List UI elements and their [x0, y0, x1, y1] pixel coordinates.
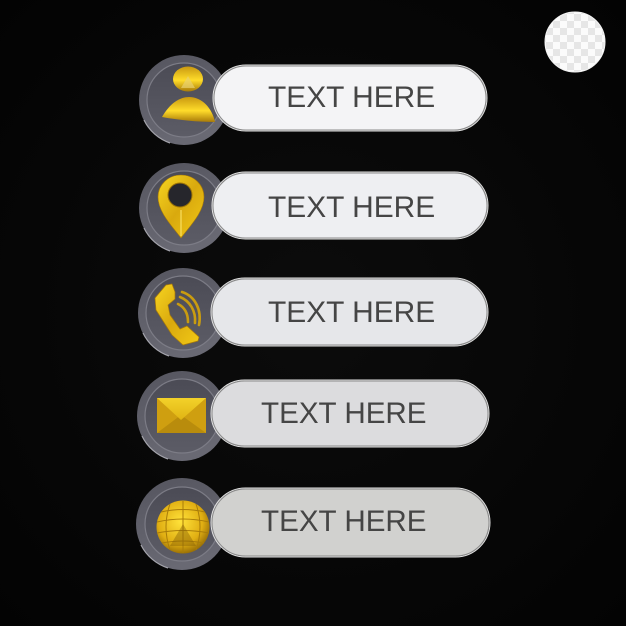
- pill 1: [213, 65, 487, 131]
- pill 4: [211, 380, 489, 447]
- text 5: TEXT HERE: [261, 505, 427, 538]
- icon: globe badge: [136, 478, 228, 570]
- row 2: location: [139, 163, 488, 253]
- icon: person badge: [139, 55, 229, 145]
- text 1: TEXT HERE: [268, 81, 435, 114]
- text 4: TEXT HERE: [261, 397, 427, 430]
- row 5: globe: [136, 478, 490, 570]
- icon: location pin badge: [139, 163, 229, 253]
- text 2: TEXT HERE: [268, 191, 435, 224]
- icon: envelope badge: [137, 371, 227, 461]
- badge: transparency checker circle: [545, 12, 605, 72]
- text 3: TEXT HERE: [268, 296, 435, 329]
- row 1: person: [139, 55, 487, 145]
- pill 3: [211, 278, 488, 346]
- icon: phone badge: [138, 268, 228, 358]
- pill 2: [212, 172, 488, 239]
- row 3: phone: [138, 268, 488, 358]
- row 4: mail: [137, 371, 489, 461]
- pill 5: [211, 488, 490, 557]
